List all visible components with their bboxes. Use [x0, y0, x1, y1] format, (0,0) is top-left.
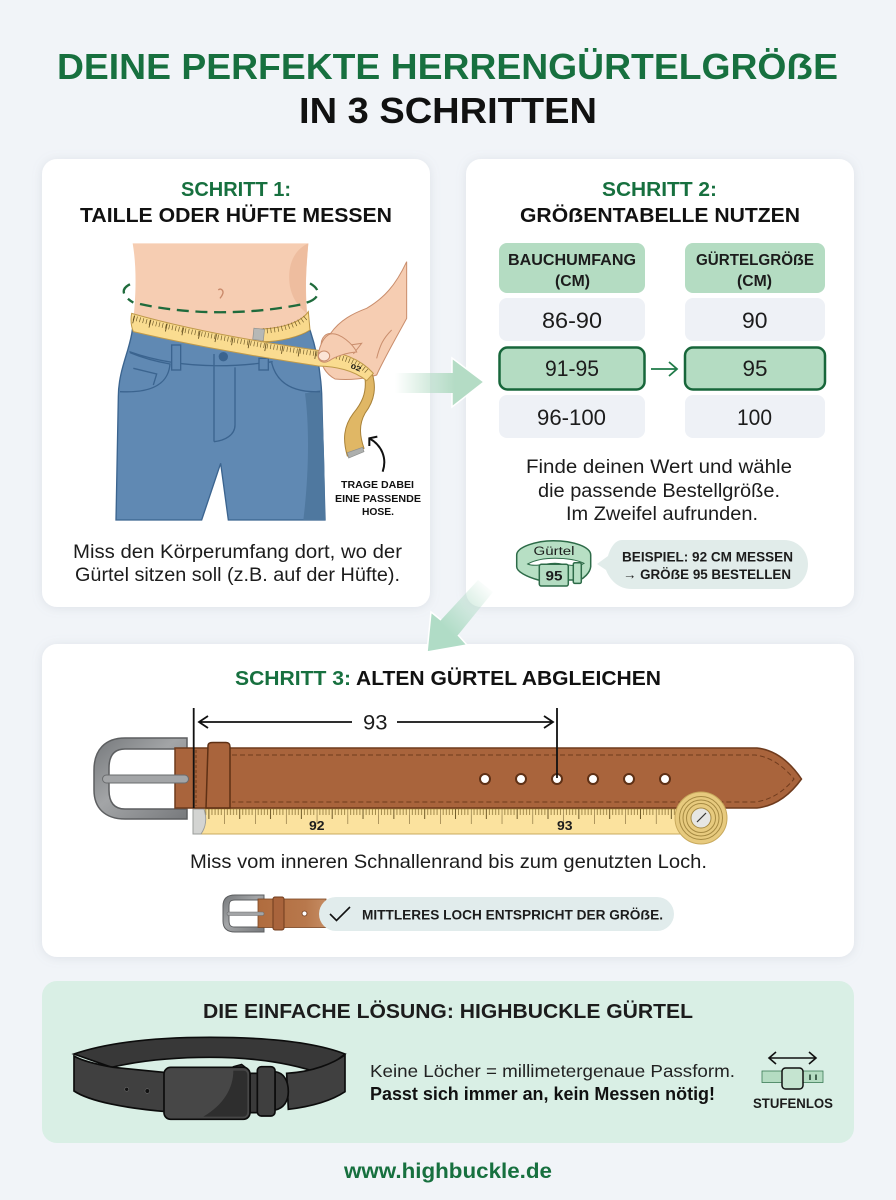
row 96-100: 96-100 [537, 405, 606, 430]
brown belt with buckle [94, 738, 802, 819]
back tape [262, 312, 310, 342]
footer url: www.highbuckle.de [343, 1160, 552, 1183]
row 91-95 highlighted: 91-95 [545, 356, 599, 381]
solution text [370, 1061, 735, 1104]
title [57, 46, 838, 131]
step 1 heading [80, 178, 392, 227]
step 2 description: Finde deinen Wert und wähle [526, 457, 792, 478]
title: DEINE PERFEKTE HERRENGÜRTELGRÖẞE [57, 46, 838, 87]
row 91-95 highlighted: 95 [742, 356, 768, 381]
header: belt size column: GÜRTELGRÖẞE [696, 252, 814, 269]
header: waist column: BAUCHUMFANG [508, 252, 636, 269]
callout: example: BEISPIEL: 92 CM MESSEN [622, 550, 793, 564]
step 3 heading [235, 667, 661, 690]
row 91-95 highlighted [500, 348, 825, 390]
note: wear fitting trousers: TRAGE DABEI [341, 479, 414, 491]
hand [321, 262, 407, 380]
step 1 heading: TAILLE ODER HÜFTE MESSEN [80, 204, 392, 227]
illustration: torso with measuring tape: 02 [349, 363, 362, 374]
header: waist column [499, 243, 645, 293]
header: belt size column: (CM) [737, 273, 772, 290]
solution text: Keine Löcher = millimetergenaue Passform. [370, 1061, 735, 1081]
arrow between columns [651, 362, 677, 376]
measuring tape with reel [193, 809, 687, 834]
buckle [94, 738, 187, 819]
step 3 heading: SCHRITT 3: [235, 667, 351, 690]
step 2 heading [520, 178, 800, 227]
step 3 heading: ALTEN GÜRTEL ABGLEICHEN [356, 667, 661, 690]
solution text: Passt sich immer an, kein Messen nötig! [370, 1084, 715, 1104]
strap [175, 748, 802, 808]
note: wear fitting trousers: HOSE. [362, 506, 394, 518]
note: wear fitting trousers [335, 479, 421, 518]
step 1 description: Miss den Körperumfang dort, wo der [73, 542, 403, 563]
illustration: torso with measuring tape [116, 243, 407, 520]
measuring tape with reel: 92 [309, 819, 325, 833]
step 2 heading: GRÖẞENTABELLE NUTZEN [520, 204, 800, 227]
tape reel [675, 792, 727, 844]
arrow: step 2 to step 3 [427, 580, 493, 652]
solution heading: DIE EINFACHE LÖSUNG: HIGHBUCKLE GÜRTEL [203, 1000, 693, 1023]
belt loop [206, 742, 230, 808]
panel: step 1 measure waist [42, 159, 430, 607]
jeans [116, 330, 325, 520]
icon: belt with size 95 [517, 541, 591, 586]
icon: belt with size 95: Gürtel [534, 546, 574, 558]
hanging tape [345, 372, 374, 456]
arrow to tape [369, 437, 384, 472]
title: IN 3 SCHRITTEN [299, 90, 597, 131]
row 86-90: 86-90 [542, 308, 602, 333]
black belt illustration [74, 1037, 345, 1119]
icon: stepless adjustment [753, 1052, 833, 1111]
row 96-100 [499, 395, 825, 438]
step 1 description: Gürtel sitzen soll (z.B. auf der Hüfte). [75, 565, 400, 586]
icon: belt with size 95: 95 [546, 568, 563, 584]
header: waist column: (CM) [555, 273, 590, 290]
panel: highbuckle solution [42, 981, 854, 1143]
callout: example [597, 540, 808, 589]
header: belt size column [685, 243, 825, 293]
callout: middle hole: MITTLERES LOCH ENTSPRICHT DER GRÖẞE. [362, 908, 663, 922]
row 86-90 [499, 298, 825, 341]
dimension: 93 [194, 708, 557, 808]
row 96-100: 100 [737, 405, 772, 430]
front tape [131, 313, 373, 381]
step 1 heading: SCHRITT 1: [181, 178, 291, 201]
callout: middle hole [319, 897, 674, 931]
mini belt icon [223, 895, 326, 932]
row 86-90: 90 [742, 308, 768, 333]
measuring tape with reel: 93 [557, 819, 573, 833]
step 2 description: Im Zweifel aufrunden. [566, 504, 758, 525]
step 2 description: die passende Bestellgröße. [538, 481, 780, 502]
step 3 description: Miss vom inneren Schnallenrand bis zum genutzten Loch. [190, 851, 707, 873]
panel: step 2 size table [466, 159, 854, 607]
icon: stepless adjustment: STUFENLOS [753, 1096, 833, 1111]
note: wear fitting trousers: EINE PASSENDE [335, 493, 421, 505]
step 2 heading: SCHRITT 2: [602, 178, 717, 201]
size table [499, 243, 825, 438]
dashed measuring guide [124, 283, 318, 312]
step 1 description [73, 542, 403, 586]
belt holes [480, 774, 670, 784]
pin [102, 775, 188, 783]
step 2 description [526, 457, 792, 525]
callout: example: → GRÖẞE 95 BESTELLEN [623, 567, 791, 582]
thumb [318, 334, 357, 362]
panel: step 3 compare old belt [42, 644, 854, 957]
dimension: 93: 93 [363, 712, 388, 734]
arrow: step 1 to step 2 [395, 358, 484, 407]
